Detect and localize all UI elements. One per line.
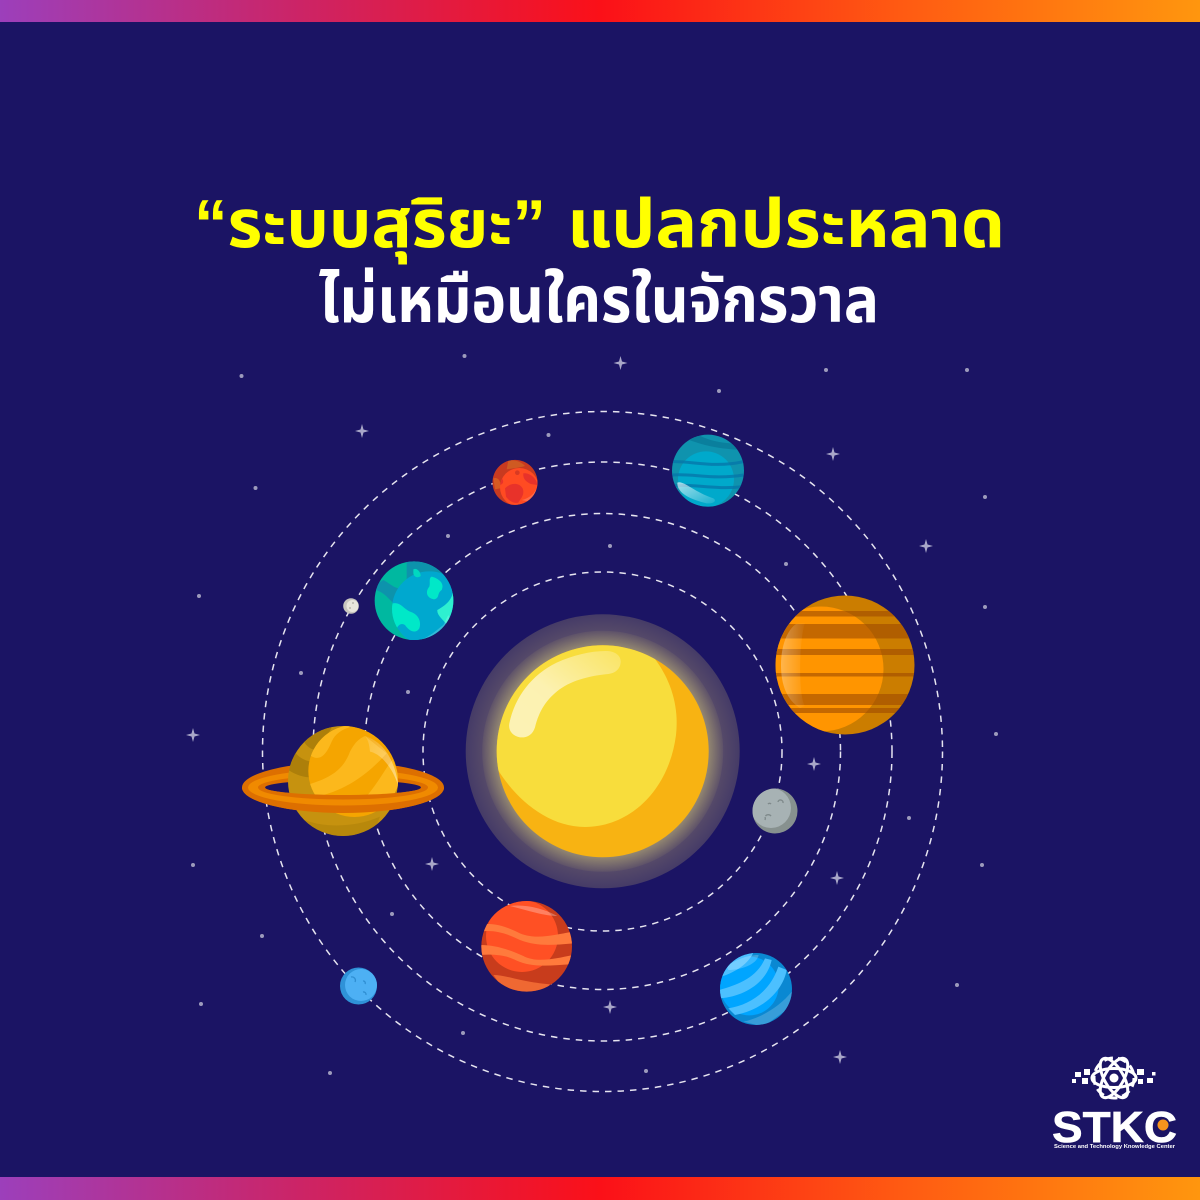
sun <box>466 614 740 888</box>
planet: mercury grey <box>751 788 798 834</box>
title line 1: “ระบบสุริยะ” <box>194 186 546 265</box>
neptune highlight <box>677 482 715 503</box>
top gradient bar <box>0 0 1200 22</box>
sun outer glow <box>466 614 740 888</box>
planet: saturn with ring <box>242 722 444 838</box>
bottom gradient bar <box>0 1177 1200 1200</box>
logo orange dot <box>1158 1120 1168 1130</box>
star field <box>186 354 998 1075</box>
planet: earth with moon <box>374 561 454 640</box>
planet: orange red <box>480 900 573 993</box>
planet: blue striped <box>720 953 792 1025</box>
sun body <box>497 645 709 857</box>
sun inner glow <box>482 631 723 872</box>
title line 2: ไม่เหมือนใครในจักรวาล <box>319 264 879 336</box>
logo: STKC <box>1052 1054 1177 1152</box>
jupiter highlight <box>781 623 805 708</box>
sun light side <box>496 645 677 827</box>
moon <box>343 598 359 614</box>
saturn ring front <box>242 788 444 813</box>
orbit paths <box>262 412 942 1092</box>
planet: jupiter orange <box>776 596 914 734</box>
title line 1 <box>194 186 1005 265</box>
planet: mars red <box>492 460 539 507</box>
saturn ring back <box>242 762 444 813</box>
logo wordmark: STKC <box>1052 1103 1177 1152</box>
title <box>194 186 1005 336</box>
planet: small blue moonlet <box>340 968 377 1004</box>
sun highlight <box>509 651 621 737</box>
planet: neptune teal <box>672 433 744 507</box>
title line 1: แปลกประหลาด <box>567 186 1005 262</box>
logo tagline: Science and Technology Knowledge Center <box>1054 1144 1176 1150</box>
saturn body <box>288 726 398 836</box>
logo atom icon <box>1072 1054 1156 1102</box>
